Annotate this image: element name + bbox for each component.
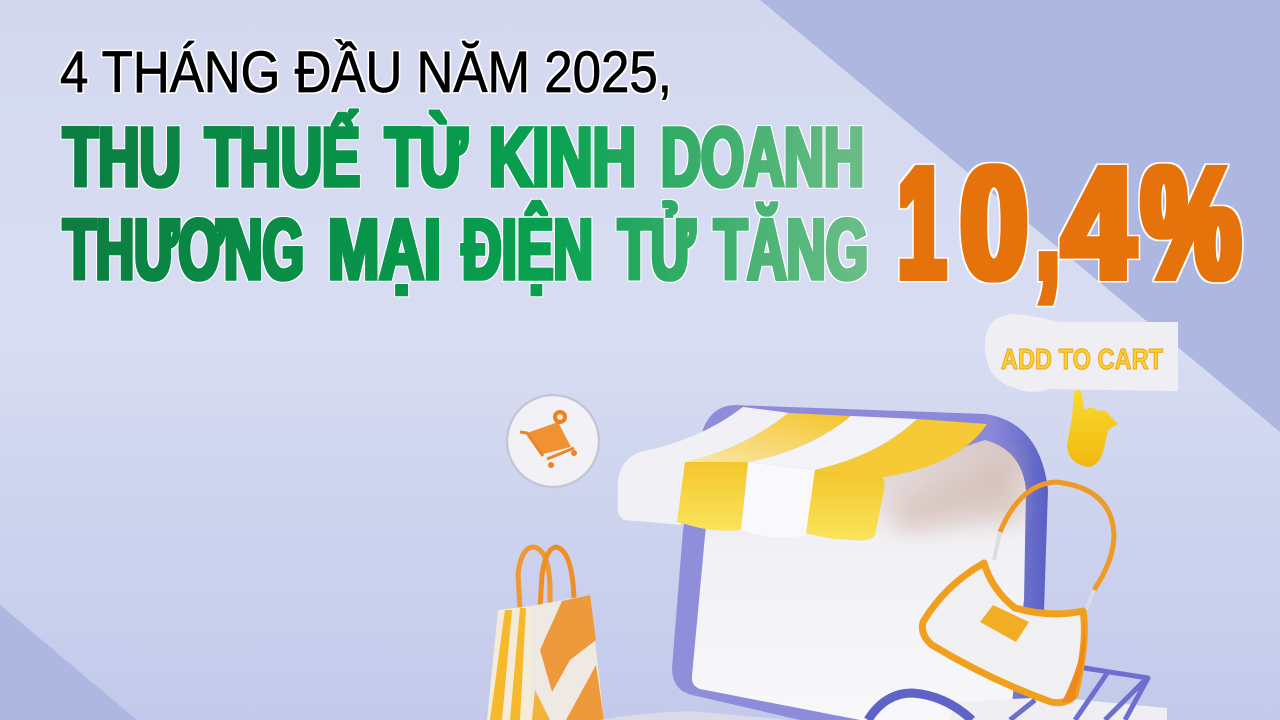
title line 3: TỬ bbox=[618, 202, 695, 298]
illustration: online shop bbox=[487, 314, 1178, 720]
title line 3: THƯƠNG bbox=[63, 202, 304, 298]
title line 2: TỪ bbox=[385, 110, 467, 204]
title line 1: 4 THÁNG ĐẦU NĂM 2025, bbox=[60, 40, 672, 105]
title line 2: DOANH bbox=[661, 110, 864, 204]
bottom left triangle bbox=[0, 605, 137, 720]
big number 10,4%: 1 bbox=[899, 133, 945, 312]
title line 3: TĂNG bbox=[714, 202, 868, 298]
keyboard bbox=[600, 711, 790, 720]
shopping bag bbox=[487, 547, 604, 720]
big number 10,4%: 0 bbox=[961, 133, 1027, 312]
big number 10,4%: % bbox=[1142, 133, 1240, 312]
title line 3: ĐIỆN bbox=[462, 202, 593, 298]
cart badge icon bbox=[507, 395, 599, 487]
monitor screen bbox=[692, 440, 1026, 720]
title line 2: THU bbox=[63, 110, 181, 204]
awning shadow bbox=[890, 450, 1020, 535]
add to cart text: ADD TO CART bbox=[1001, 344, 1163, 376]
monitor frame bbox=[672, 405, 1048, 720]
big number 10,4%: 4 bbox=[1063, 133, 1134, 312]
pointing hand bbox=[1067, 390, 1118, 467]
handbag bbox=[922, 482, 1114, 703]
add to cart bubble bbox=[985, 314, 1178, 392]
title line 2: THUẾ bbox=[205, 110, 360, 204]
awning bbox=[618, 407, 987, 540]
cart basket bbox=[868, 667, 1167, 720]
title line 2: KINH bbox=[489, 110, 636, 204]
top right triangle bbox=[760, 0, 1280, 432]
title line 3: MẠI bbox=[328, 202, 441, 298]
big number 10,4%: , bbox=[1038, 133, 1058, 312]
